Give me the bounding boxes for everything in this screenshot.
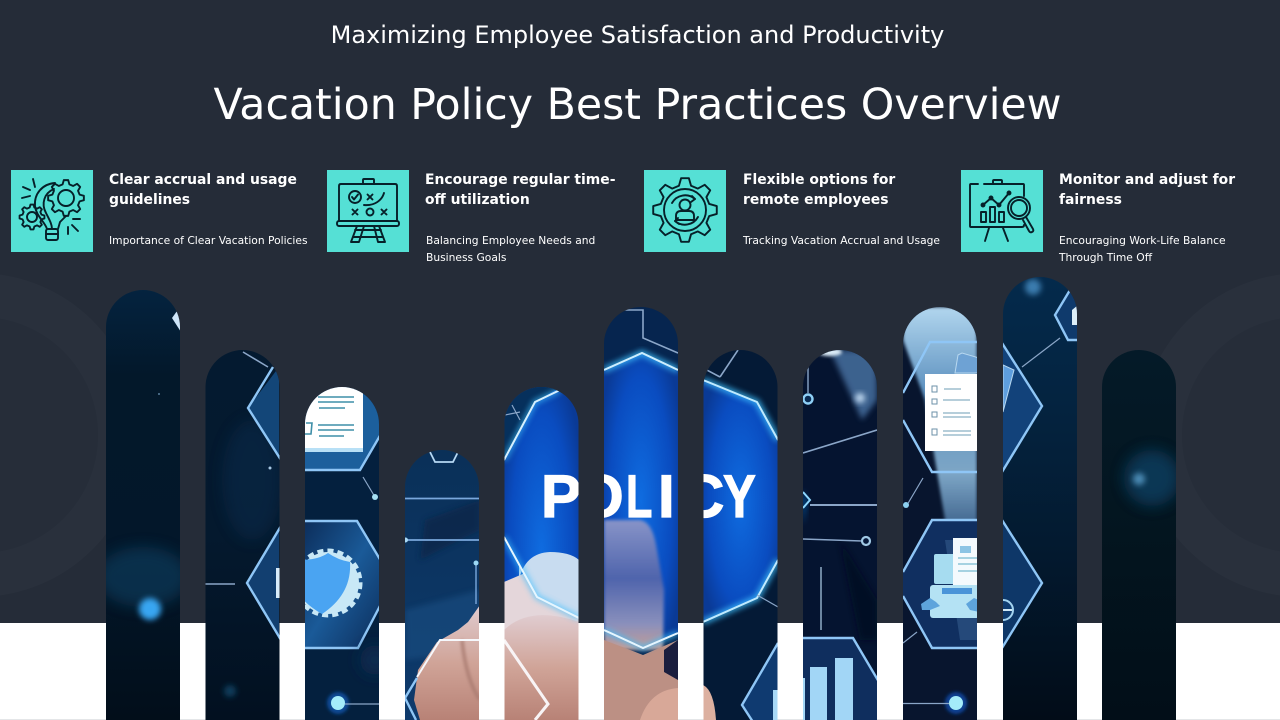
photo strip 6: I <box>658 463 675 530</box>
photo strip 6 <box>604 307 678 720</box>
heading: flexible options: remote employees <box>743 192 888 208</box>
heading: flexible options: Flexible options for <box>743 172 895 188</box>
heading: clear accrual <box>109 172 297 208</box>
heading: clear accrual: Clear accrual and usage <box>109 172 297 188</box>
photo strip 9 <box>903 307 985 720</box>
heading: encourage time off <box>425 172 615 208</box>
icon 3: gear with person <box>644 170 726 252</box>
photo strip 11 <box>1102 350 1180 720</box>
text: balancing needs <box>426 234 595 264</box>
photo strip 8 <box>803 348 879 720</box>
text: work-life balance: Through Time Off <box>1059 251 1152 264</box>
heading: monitor and adjust: fairness <box>1059 192 1122 208</box>
heading: clear accrual: guidelines <box>109 192 190 208</box>
photo strip 7: Y <box>723 462 756 530</box>
heading: flexible options <box>743 172 896 208</box>
heading: encourage time off: Encourage regular time- <box>425 172 615 188</box>
subtitle: Maximizing Employee Satisfaction and Productivity <box>331 21 944 49</box>
heading: monitor and adjust: Monitor and adjust for <box>1059 172 1235 188</box>
photo strip 5: P <box>541 463 581 530</box>
photo strip 6: O <box>577 463 624 530</box>
heading: encourage time off: off utilization <box>425 192 530 208</box>
photo strip 4 <box>403 450 480 720</box>
icon 4: presentation chart with magnifier <box>961 170 1043 252</box>
photo strip 7: C <box>681 463 724 530</box>
text: clear policies: Importance of Clear Vacation Policies <box>109 234 308 247</box>
text: tracking accrual: Tracking Vacation Accrual and Usage <box>743 234 940 247</box>
photo strip 7 <box>704 350 778 720</box>
text: balancing needs: Balancing Employee Needs and <box>426 234 595 247</box>
heading: monitor and adjust <box>1059 172 1236 208</box>
text: work-life balance <box>1058 234 1226 264</box>
photo strip 2 <box>205 350 282 720</box>
photo strip 3 <box>305 387 379 720</box>
title: Vacation Policy Best Practices Overview <box>213 80 1062 130</box>
photo strip 10 <box>1003 277 1077 720</box>
text: work-life balance: Encouraging Work-Life Balance <box>1059 234 1226 247</box>
photo strip 6: L <box>626 464 652 531</box>
icon 1: lightbulb with gears <box>11 170 93 252</box>
icon 2: strategy board on easel <box>327 170 409 252</box>
text: balancing needs: Business Goals <box>426 251 506 264</box>
photo strip 5 <box>504 387 581 720</box>
photo strip 1 <box>106 290 180 720</box>
